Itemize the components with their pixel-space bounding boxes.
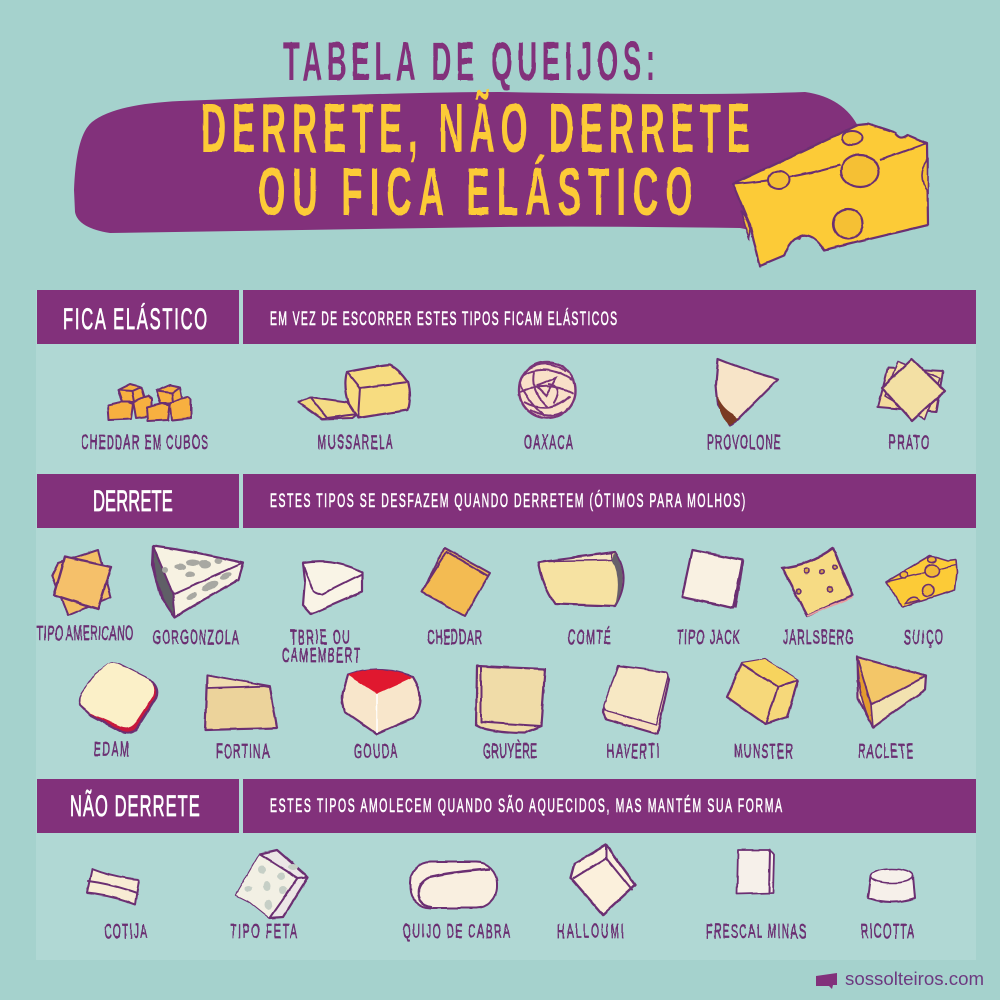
panel: fica elástico: [37, 290, 976, 454]
cheese: gruyère: [476, 666, 545, 763]
cheese: tipo americano: TIPO AMERICANO: [37, 624, 133, 645]
title line: tabela de queijos: TABELA DE QUEIJOS:: [283, 32, 655, 93]
cheese: queijo de cabra: [403, 862, 510, 943]
cheese: haverti: [603, 666, 669, 763]
cheese: provolone: PROVOLONE: [707, 433, 781, 454]
cheese: halloumi: [557, 845, 635, 943]
cheese: halloumi: HALLOUMI: [557, 922, 624, 943]
cheese: brie ou camembert: CAMEMBERT: [282, 646, 360, 667]
description: fica elástico: EM VEZ DE ESCORRER ESTES TIPOS FICAM ELÁSTICOS: [270, 309, 617, 330]
cheese: oaxaca: OAXACA: [524, 433, 573, 454]
header: não derrete: [37, 779, 239, 833]
cheese: cheddar: CHEDDAR: [427, 628, 482, 649]
description: derrete: [243, 474, 976, 528]
panel: derrete: [37, 474, 976, 763]
cheese: comté: COMTÉ: [568, 625, 611, 649]
panel: não derrete: [37, 779, 976, 943]
header: derrete: DERRETE: [93, 485, 173, 518]
cheese: suíço: SUIÇO: [904, 628, 943, 649]
cheese: tipo jack: [677, 550, 743, 649]
title banner: [74, 92, 862, 240]
cheese: gorgonzola: [152, 546, 243, 649]
cheese: edam: EDAM: [94, 740, 129, 761]
icon: large swiss cheese: [733, 124, 928, 266]
cheese: edam: [80, 663, 157, 761]
cheese: jarlsberg: [782, 548, 853, 649]
cheese: gruyère: GRUYÈRE: [483, 739, 537, 763]
cheese: brie ou camembert: [282, 562, 362, 667]
cheese: munster: MUNSTER: [734, 742, 793, 763]
cheese: provolone: [707, 359, 781, 454]
description: não derrete: ESTES TIPOS AMOLECEM QUANDO SÃO AQUECIDOS, MAS MANTÉM SUA FORMA: [270, 796, 783, 817]
title: [74, 32, 928, 266]
cheese: oaxaca: [519, 362, 575, 454]
header: fica elástico: FICA ELÁSTICO: [63, 303, 207, 336]
cheese: munster: [727, 659, 798, 763]
cheese: cotija: COTIJA: [104, 922, 147, 943]
cheese: cheddar em cubos: CHEDDAR EM CUBOS: [81, 433, 208, 454]
description: derrete: ESTES TIPOS SE DESFAZEM QUANDO DERRETEM (ÓTIMOS PARA MOLHOS): [270, 491, 745, 512]
cheese: ricotta: [861, 869, 915, 943]
cheese: tipo feta: [230, 850, 308, 943]
cheese: frescal minas: [706, 850, 806, 943]
cheese: fortina: FORTINA: [216, 742, 269, 763]
cheese: cotija: [87, 869, 147, 943]
cheese: brie ou camembert: TBRIE OU: [290, 628, 350, 649]
cheese: gouda: GOUDA: [354, 742, 397, 763]
cheese: suíço: [886, 556, 957, 649]
cheese: queijo de cabra: QUIJO DE CABRA: [403, 922, 510, 943]
cheese: gorgonzola: GORGONZOLA: [153, 628, 239, 649]
cheese: tipo jack: TIPO JACK: [677, 628, 740, 649]
cheese: mussarela: MUSSARELA: [318, 433, 393, 454]
cheese: cheddar: [422, 548, 490, 649]
cheese: raclete: RACLETE: [858, 742, 913, 763]
title line: ou fica elástico: OU FICA ELÁSTICO: [258, 155, 693, 230]
header: não derrete: NÃO DERRETE: [70, 790, 200, 823]
title line: derrete, não derrete: DERRETE, NÃO DERRETE: [201, 89, 750, 167]
cheese: tipo feta: TIPO FETA: [230, 922, 297, 943]
cheese: raclete: [857, 657, 926, 763]
cheese: ricotta: RICOTTA: [861, 922, 914, 943]
cheese: haverti: HAVERTI: [607, 742, 659, 763]
cheese: gouda: [342, 670, 420, 763]
description: não derrete: [243, 779, 976, 833]
cheese: frescal minas: FRESCAL MINAS: [706, 922, 806, 943]
cheese: prato: PRATO: [889, 433, 929, 454]
header: derrete: [37, 474, 239, 528]
cheese: tipo americano: [37, 550, 133, 645]
footer: sossolteiros.com logo: sossolteiros.com: [845, 969, 984, 989]
cheese: prato: [878, 359, 945, 454]
header: fica elástico: [37, 290, 239, 344]
cheese: cheddar em cubos: [81, 384, 208, 454]
description: fica elástico: [243, 290, 976, 344]
cheese: comté: [538, 552, 624, 649]
cheese: mussarela: [298, 365, 410, 454]
cheese: fortina: [205, 675, 277, 763]
cheese: jarlsberg: JARLSBERG: [783, 628, 853, 649]
